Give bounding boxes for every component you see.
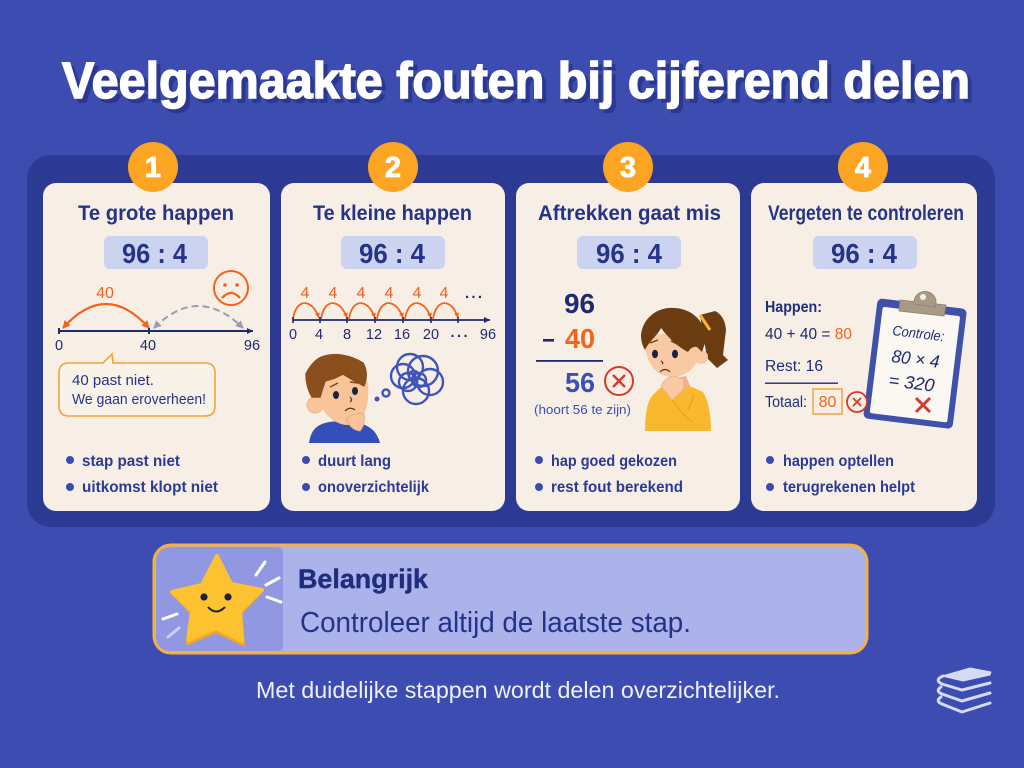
number line with jumps of 4: 4 [301,285,310,302]
icon: worried girl [641,308,728,431]
sum 3: 96 : 4 [596,238,662,269]
number line with jumps of 4: 8 [343,327,351,343]
sum 4 [813,236,917,269]
bullet list 3: rest fout berekend [551,479,683,496]
footer text: Met duidelijke stappen wordt delen overzichtelijker. [256,677,780,703]
title: Veelgemaakte fouten bij cijferend delen [62,52,970,109]
number line 0 40 96: 40 [140,338,156,354]
bullet list 3: hap goed gekozen [551,453,677,470]
number line with jumps of 4: 4 [413,285,422,302]
callout: 40 past niet. [72,372,154,389]
bullet list 3 [535,453,683,496]
sum 1 [104,236,208,269]
badge 2 [368,142,418,192]
number line with jumps of 4: 4 [315,327,323,343]
banner text: Controleer altijd de laatste stap. [300,607,691,639]
clipboard: Controle: [892,322,945,344]
column subtraction: 96 [564,288,595,319]
bullet list 1: uitkomst klopt niet [82,479,219,496]
rest and total working: Happen: [765,299,822,316]
banner heading: Belangrijk [298,564,429,594]
panel: card 3 aftrekken gaat mis [516,142,740,511]
callout: We gaan eroverheen! [72,391,206,408]
number line with jumps of 4: ... [450,325,468,341]
number line with jumps of 4: 4 [440,285,449,302]
clipboard: 80 × 4 [891,346,941,372]
number line with jumps of 4: ... [465,285,482,302]
sum 3 [577,236,681,269]
title: Veelgemaakte fouten bij cijferend delen [66,56,974,113]
number line with jumps of 4: 4 [329,285,338,302]
callout: belangrijk banner [154,545,867,653]
rest and total working [765,299,867,414]
callout [59,354,215,416]
panel: card 4 vergeten te controleren [751,142,977,511]
icon: stack of books [938,668,991,712]
bullet list 1: stap past niet [82,453,181,470]
badge 4: 4 [855,152,871,184]
number line with jumps of 4: 4 [385,285,394,302]
bullet list 4: terugrekenen helpt [783,479,916,496]
column subtraction: (hoort 56 te zijn) [534,402,631,417]
sum 1: 96 : 4 [122,238,187,269]
number line with jumps of 4: 0 [289,327,297,343]
icon: tangled thought [374,354,443,404]
number line 0 40 96: 40 [96,285,114,302]
panel: card 1 te grote happen [43,142,270,511]
clipboard: = 320 [888,370,936,396]
badge 1 [128,142,178,192]
icon: thinking boy [306,355,380,443]
panel: card 2 te kleine happen [281,142,505,511]
bullet list 2: duurt lang [318,453,391,470]
number line 0 40 96 [55,285,260,354]
number line 0 40 96: 0 [55,338,63,354]
heading 1: Te grote happen [78,202,234,225]
number line with jumps of 4: 12 [366,327,382,343]
column subtraction: 56 [565,367,595,398]
icon: sad face [214,271,248,305]
column subtraction [534,288,633,417]
heading 4: Vergeten te controleren [768,202,964,225]
bullet list 4: happen optellen [783,453,894,470]
badge 2: 2 [385,152,401,184]
badge 1: 1 [145,152,161,184]
clipboard [863,291,967,429]
badge 3 [603,142,653,192]
rest and total working: 80 [819,394,836,411]
number line with jumps of 4: 20 [423,327,439,343]
rest and total working: Rest: 16 [765,358,823,375]
heading 3: Aftrekken gaat mis [538,202,721,225]
number line 0 40 96: 96 [244,338,260,354]
sum 2: 96 : 4 [359,238,425,269]
rest and total working: 40 + 40 = 80 [765,326,852,343]
badge 3: 3 [620,152,636,184]
bullet list 4 [766,453,916,496]
bullet list 1 [66,453,219,496]
bullet list 2: onoverzichtelijk [318,479,429,496]
sum 4: 96 : 4 [831,238,897,269]
rest and total working: Totaal: [765,394,807,411]
number line with jumps of 4: 4 [357,285,366,302]
number line with jumps of 4: 96 [480,327,496,343]
number line with jumps of 4 [289,285,496,343]
sum 2 [341,236,445,269]
number line with jumps of 4: 16 [394,327,410,343]
heading 2: Te kleine happen [313,202,472,225]
icon: smiling star [163,556,281,644]
bullet list 2 [302,453,429,496]
panel: background of cards [27,155,995,527]
badge 4 [838,142,888,192]
column subtraction: 40 [565,323,595,354]
